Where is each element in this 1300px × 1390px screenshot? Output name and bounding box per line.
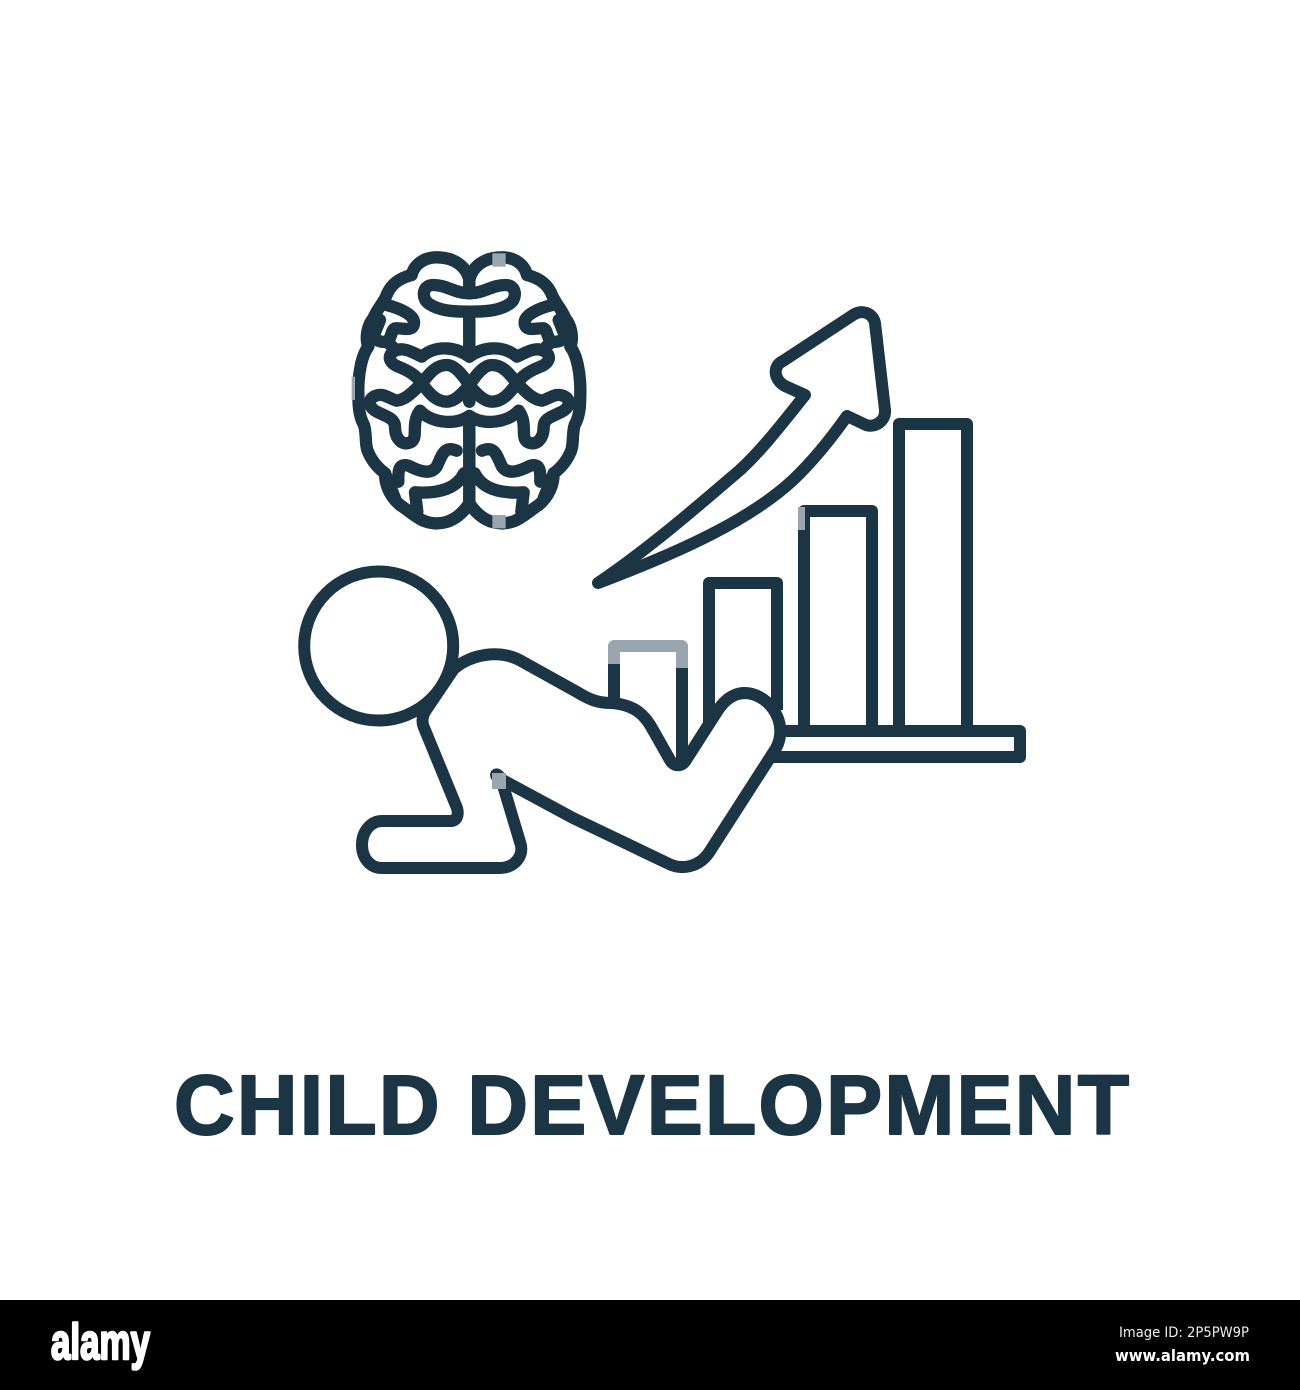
bar 1 watermark-faded top — [614, 646, 682, 668]
bar chart — [614, 424, 1020, 760]
watermark fragments — [492, 507, 805, 789]
image id: Image ID: 2P5PW9P — [1119, 1325, 1249, 1341]
bar 2 — [709, 583, 777, 725]
child head — [304, 572, 453, 720]
footer bar — [0, 1300, 1300, 1390]
bar 3 — [804, 511, 872, 731]
website: www.alamy.com — [1115, 1346, 1250, 1365]
child body — [362, 654, 780, 868]
bar 1 — [614, 663, 682, 760]
logo: alamy: alamy — [51, 1314, 150, 1370]
base shelf — [770, 731, 1020, 757]
icon: brain — [352, 253, 580, 528]
title: CHILD DEVELOPMENT — [174, 1058, 1129, 1152]
icon: rising arrow — [598, 312, 885, 583]
bar 4 — [899, 424, 967, 731]
icon: crawling child — [304, 572, 780, 868]
